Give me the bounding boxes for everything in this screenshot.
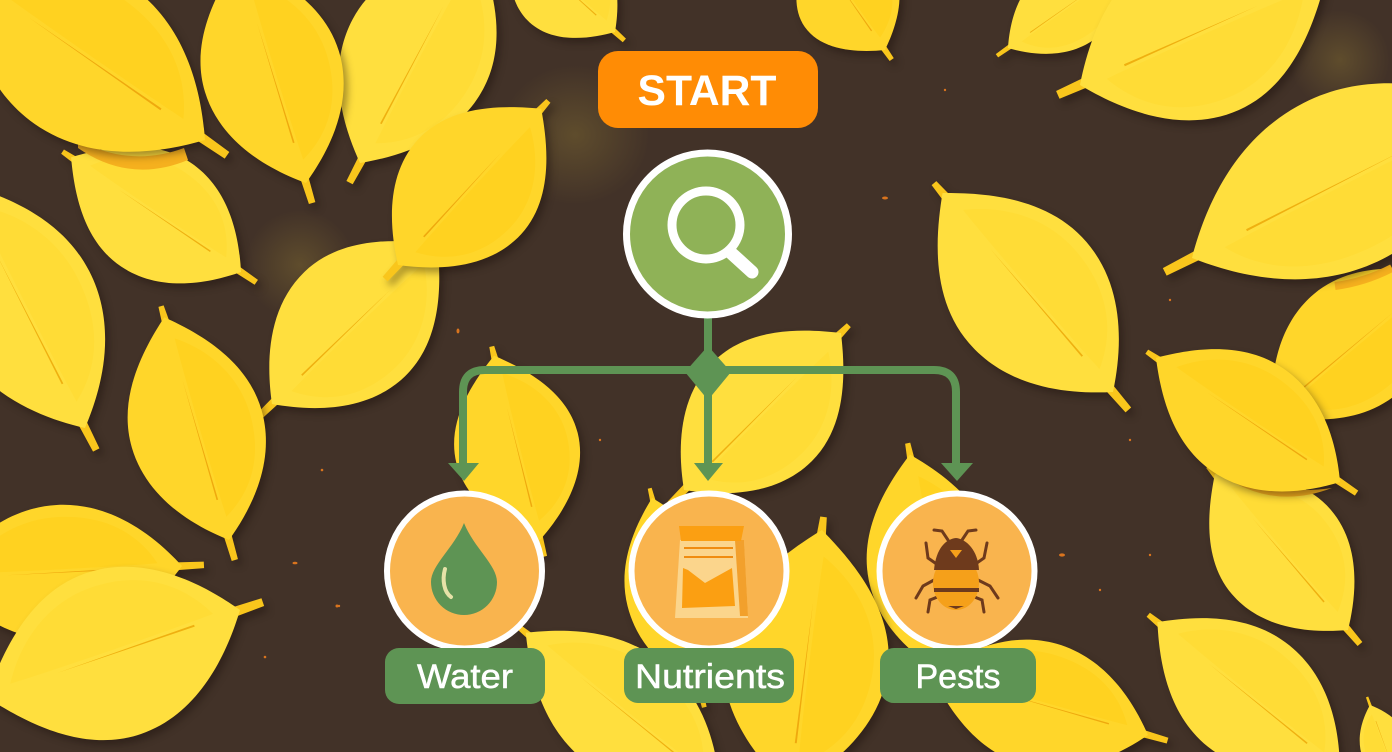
leaf: right edge upper: [1125, 18, 1392, 350]
nutrients node: [632, 494, 786, 648]
leaf: right lower: [1159, 424, 1392, 686]
soil speckles: [264, 89, 1171, 658]
leaf: top right large: [1022, 0, 1375, 175]
connector arrows: [448, 316, 973, 481]
pests node: [880, 494, 1034, 648]
leaf: behind nutrients upper: [620, 276, 898, 554]
label: water: [385, 648, 545, 704]
leaf shadow rim: right edge: [1335, 268, 1392, 286]
leaf: top centre left: [284, 0, 547, 217]
leaf: top centre stub: [472, 0, 658, 78]
leaf: right edge middle: [1215, 216, 1392, 476]
leaf: left edge: [0, 137, 163, 484]
leaf: bottom left front: [0, 522, 290, 752]
leaf: behind nutrients left: [601, 476, 753, 719]
leaf: left centre: [96, 287, 300, 579]
leaf: bottom centre left: [477, 576, 777, 752]
leaf: top right small: [973, 0, 1161, 91]
leaf: bottom left rear: [0, 497, 207, 647]
leaf: upper left large: [0, 0, 275, 224]
leaf: bottom right corner: [1344, 688, 1392, 752]
leaf: mid left lower: [207, 184, 496, 471]
leaf: top left centre: [168, 0, 379, 224]
icon: beetle: [916, 530, 998, 612]
search circle: [626, 153, 788, 315]
leaf: mid left upper: [334, 54, 600, 326]
leaf shadow rim: upper left: [78, 140, 188, 170]
icon: water drop: [431, 523, 497, 615]
background glows: [245, 10, 1390, 320]
leaf: bottom right centre: [903, 610, 1185, 752]
icon: fertilizer bag: [675, 526, 748, 618]
leaf: behind pests: [844, 430, 1023, 713]
water node: [387, 494, 542, 648]
label: pests: Pests: [916, 658, 1000, 696]
start button: START: [638, 67, 776, 115]
leaf: top right stub: [764, 0, 935, 90]
leaf: bottom centre: [705, 507, 905, 752]
label: water: Water: [417, 658, 513, 696]
label: nutrients: Nutrients: [635, 658, 785, 696]
leaf shadow rim: right middle: [1202, 458, 1332, 497]
icon: magnifying glass: [672, 191, 752, 272]
leaf: right middle: [1112, 300, 1392, 545]
leaf: behind water: [431, 331, 605, 572]
start button: [598, 51, 818, 128]
leaf: upper left rear: [28, 100, 291, 334]
leaf: centre right: [875, 133, 1187, 460]
label: pests: [880, 648, 1036, 703]
label: nutrients: [624, 648, 794, 703]
leaf: bottom right: [1107, 564, 1392, 752]
